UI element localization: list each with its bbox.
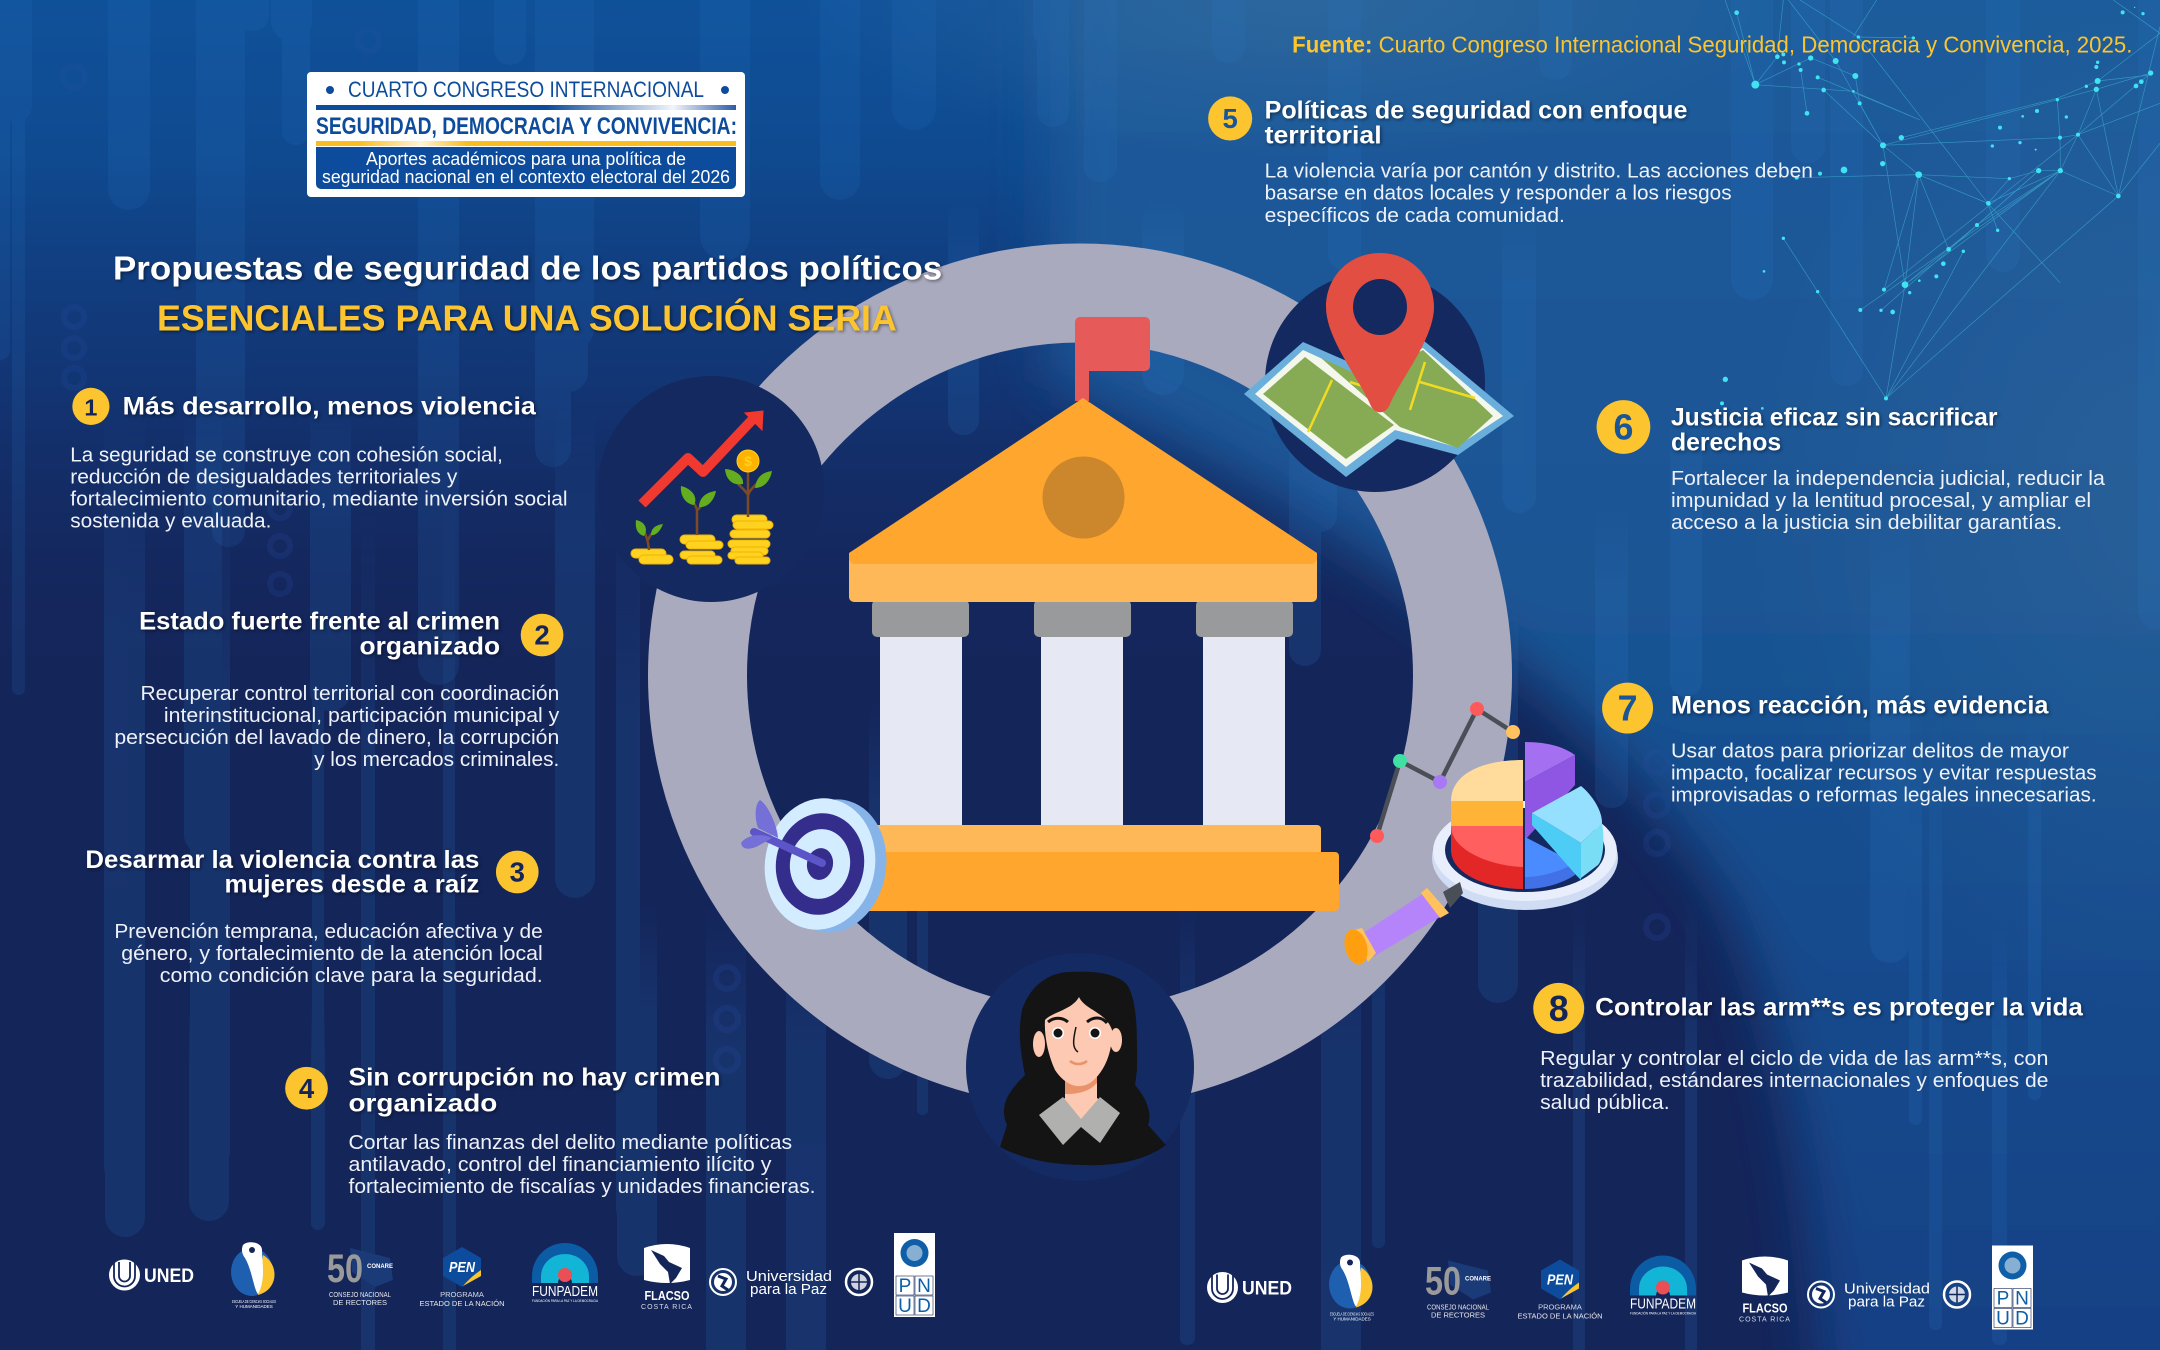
body 1: fortalecimiento comunitario, mediante inversión social bbox=[70, 488, 568, 511]
sprouts bbox=[641, 472, 760, 550]
heading 3: Desarmar la violencia contra las bbox=[85, 847, 479, 874]
pie left bbox=[1451, 760, 1523, 801]
lens bbox=[1432, 806, 1618, 910]
body 8: trazabilidad, estándares internacionales y enfoques de bbox=[1540, 1069, 2048, 1092]
body 3: género, y fortalecimiento de la atención local bbox=[121, 942, 543, 965]
badge 3 bbox=[496, 851, 539, 893]
handle bbox=[1360, 893, 1440, 957]
logo row right bbox=[1207, 1246, 2033, 1330]
body 4: fortalecimiento de fiscalías y unidades financieras. bbox=[349, 1175, 816, 1198]
pediment oval bbox=[1042, 456, 1124, 538]
line chart bbox=[1377, 709, 1513, 836]
icon: data analytics and magnifier bbox=[1341, 702, 1618, 967]
logo: PNUD: U bbox=[898, 1296, 912, 1317]
face bbox=[1045, 997, 1112, 1086]
facial features bbox=[1048, 1018, 1107, 1064]
badge 4: 4 bbox=[299, 1073, 315, 1104]
badge 1 bbox=[72, 388, 110, 425]
source line: Fuente: Cuarto Congreso Internacional Seguridad, Democracia y Convivencia, 2025. bbox=[1292, 31, 2132, 57]
logo: FUNPADEM: FUNDACIÓN PARA LA PAZ Y LA DEMOCRACIA bbox=[532, 1298, 598, 1303]
item 5 bbox=[1208, 96, 1813, 227]
title bbox=[113, 251, 942, 339]
heading 4 bbox=[349, 1065, 720, 1118]
heading 1: Más desarrollo, menos violencia bbox=[123, 394, 536, 421]
body 2: interinstitucional, participación municipal y bbox=[164, 704, 560, 727]
body 7: impacto, focalizar recursos y evitar respuestas bbox=[1671, 762, 2097, 785]
badge 6 bbox=[1597, 400, 1650, 454]
body 1: sostenida y evaluada. bbox=[70, 510, 271, 533]
ears bbox=[1033, 1031, 1045, 1057]
logo: CONARE bbox=[327, 1247, 393, 1307]
logo: PEN: PEN bbox=[1547, 1272, 1574, 1288]
heading 5: territorial bbox=[1265, 122, 1382, 149]
logo: FLACSO bbox=[1739, 1256, 1791, 1324]
badge 2 bbox=[521, 614, 563, 656]
congress subtitle bbox=[316, 147, 736, 189]
logo: PNUD: N bbox=[917, 1276, 931, 1297]
logo: PNUD bbox=[1992, 1246, 2033, 1330]
logo: FLACSO: COSTA RICA bbox=[641, 1304, 693, 1311]
item 7 bbox=[1602, 683, 2097, 807]
congress line 2: SEGURIDAD, DEMOCRACIA Y CONVIVENCIA: bbox=[316, 113, 737, 140]
logo: Universidad para la Paz: para la Paz bbox=[750, 1281, 827, 1298]
heading 3 bbox=[85, 847, 479, 899]
congress line 1: CUARTO CONGRESO INTERNACIONAL bbox=[348, 77, 704, 102]
central ring bbox=[698, 293, 1462, 1058]
body 6: acceso a la justicia sin debilitar garantías. bbox=[1671, 511, 2062, 534]
pin bbox=[1326, 253, 1434, 412]
logo: CONARE: DE RECTORES bbox=[333, 1298, 387, 1307]
logo: PEN: PROGRAMA bbox=[440, 1290, 484, 1299]
logo: Universidad para la Paz: para la Paz bbox=[1848, 1294, 1925, 1310]
map land bbox=[1263, 357, 1394, 459]
logo: school: ESCUELA DE CIENCIAS SOCIALES bbox=[232, 1299, 276, 1304]
column base upper step bbox=[860, 825, 1321, 855]
column capitals bbox=[872, 600, 1293, 637]
heading 6: derechos bbox=[1671, 429, 1781, 456]
body 8 bbox=[1540, 1047, 2048, 1114]
logo: FUNPADEM: FUNPADEM bbox=[1630, 1296, 1696, 1312]
logo: PNUD: U bbox=[1996, 1308, 2010, 1330]
body 6: impunidad y la lentitud procesal, y ampliar el bbox=[1671, 489, 2091, 512]
entablature bbox=[849, 555, 1317, 602]
body 2: persecución del lavado de dinero, la corrupción bbox=[114, 726, 559, 749]
logo: PNUD: D bbox=[917, 1296, 931, 1317]
body 8: salud pública. bbox=[1540, 1091, 1670, 1114]
item 1 bbox=[70, 388, 568, 533]
logo: school: Y HUMANIDADES bbox=[235, 1304, 273, 1309]
heading 2 bbox=[139, 609, 500, 660]
body 3: como condición clave para la seguridad. bbox=[160, 964, 543, 987]
icon circle: growth bbox=[598, 376, 824, 602]
badge 8 bbox=[1533, 983, 1584, 1034]
logo: UN emblem bbox=[1944, 1282, 1970, 1308]
body 1: reducción de desigualdades territoriales y bbox=[70, 466, 458, 489]
item 8 bbox=[1533, 983, 2083, 1114]
body 1 bbox=[70, 443, 568, 533]
hair and shoulders bbox=[1000, 972, 1166, 1165]
badge 7: 7 bbox=[1618, 688, 1638, 728]
badge 3: 3 bbox=[510, 857, 525, 888]
body 5: basarse en datos locales y responder a los riesgos bbox=[1265, 182, 1732, 205]
coins bbox=[631, 515, 773, 564]
pie right cyan bbox=[1532, 813, 1581, 880]
logo: UNED: UNED bbox=[1242, 1278, 1292, 1300]
logo: UPAZ emblem bbox=[710, 1269, 736, 1295]
icon circle: person bbox=[966, 953, 1194, 1181]
logo: PNUD: P bbox=[1997, 1288, 2009, 1310]
logo: FUNPADEM: FUNPADEM bbox=[532, 1283, 598, 1300]
logo: FUNPADEM: FUNDACIÓN PARA LA PAZ Y LA DEMOCRACIA bbox=[1630, 1310, 1696, 1316]
map outer bbox=[1244, 340, 1514, 477]
icon: target with arrow bbox=[741, 789, 897, 941]
body 4: Cortar las finanzas del delito mediante políticas bbox=[349, 1131, 792, 1154]
logo: FLACSO: COSTA RICA bbox=[1739, 1316, 1791, 1324]
icon circle: map bbox=[1265, 272, 1485, 492]
logo: CONARE: 50 bbox=[1425, 1260, 1461, 1304]
badge 6: 6 bbox=[1613, 407, 1633, 447]
dollar coin bbox=[737, 450, 759, 472]
body 3 bbox=[114, 920, 543, 987]
logo: PNUD bbox=[894, 1233, 935, 1317]
logo: CONARE: CONSEJO NACIONAL bbox=[1427, 1302, 1489, 1312]
body 1: La seguridad se construye con cohesión social, bbox=[70, 443, 503, 466]
badge 7 bbox=[1602, 683, 1653, 734]
title line 2: ESENCIALES PARA UNA SOLUCIÓN SERIA bbox=[157, 299, 897, 339]
logo: CONARE: CONSEJO NACIONAL bbox=[329, 1290, 391, 1299]
heading 2: Estado fuerte frente al crimen bbox=[139, 609, 500, 636]
logo: school bbox=[1329, 1255, 1374, 1322]
pie right blue bbox=[1525, 837, 1575, 889]
body 5 bbox=[1265, 160, 1813, 227]
congress subtitle: Aportes académicos para una política de bbox=[366, 149, 686, 169]
heading 8: Controlar las arm**s es proteger la vida bbox=[1595, 994, 2083, 1021]
logo: PNUD: N bbox=[2015, 1288, 2029, 1310]
logo: CONARE: 50 bbox=[327, 1247, 363, 1291]
logo: PEN: ESTADO DE LA NACIÓN bbox=[1518, 1312, 1602, 1320]
logo: UN emblem bbox=[846, 1269, 872, 1295]
logo: school: ESCUELA DE CIENCIAS SOCIALES bbox=[1330, 1312, 1374, 1316]
body 2 bbox=[114, 682, 560, 771]
logo: school bbox=[231, 1242, 276, 1309]
body 6 bbox=[1671, 467, 2105, 534]
body 6: Fortalecer la independencia judicial, reducir la bbox=[1671, 467, 2105, 490]
body 7 bbox=[1671, 740, 2097, 807]
logo: PNUD: P bbox=[899, 1276, 911, 1297]
flag bbox=[1075, 317, 1150, 401]
logo: PEN: PEN bbox=[449, 1259, 476, 1276]
logo: CONARE: CONARE bbox=[1465, 1276, 1491, 1282]
collar bbox=[1039, 1097, 1120, 1145]
body 7: Usar datos para priorizar delitos de mayor bbox=[1671, 740, 2069, 763]
logo: CONARE: DE RECTORES bbox=[1431, 1310, 1485, 1320]
heading 4: Sin corrupción no hay crimen bbox=[349, 1065, 720, 1092]
logo: PEN bbox=[1518, 1260, 1602, 1320]
item 4 bbox=[285, 1065, 816, 1198]
logo row left bbox=[109, 1233, 935, 1317]
icon: woman portrait bbox=[1000, 972, 1166, 1165]
logo: UNED: UNED bbox=[144, 1266, 194, 1287]
heading 6: Justicia eficaz sin sacrificar bbox=[1671, 405, 1998, 432]
heading 2: organizado bbox=[360, 633, 500, 660]
logo: FUNPADEM bbox=[532, 1243, 598, 1303]
logo: UPAZ emblem bbox=[1808, 1282, 1834, 1308]
body 3: Prevención temprana, educación afectiva y de bbox=[114, 920, 543, 943]
badge 5: 5 bbox=[1222, 103, 1238, 134]
heading 7: Menos reacción, más evidencia bbox=[1671, 693, 2049, 720]
item 3 bbox=[85, 847, 543, 987]
body 2: y los mercados criminales. bbox=[314, 748, 559, 771]
logo: FLACSO: FLACSO bbox=[644, 1288, 690, 1303]
network decoration bbox=[1720, 0, 2160, 410]
badge 5 bbox=[1208, 96, 1252, 141]
heading 6 bbox=[1671, 405, 1998, 456]
heading 4: organizado bbox=[349, 1091, 497, 1118]
item 2 bbox=[114, 609, 563, 771]
logo: UNED bbox=[109, 1260, 194, 1290]
body 4: antilavado, control del financiamiento ilícito y bbox=[349, 1153, 772, 1176]
body 5: específicos de cada comunidad. bbox=[1265, 204, 1565, 227]
body 2: Recuperar control territorial con coordinación bbox=[141, 682, 559, 705]
logo: CONARE: CONARE bbox=[367, 1264, 393, 1270]
icon: growth chart and coins bbox=[631, 411, 773, 564]
title line 1: Propuestas de seguridad de los partidos políticos bbox=[113, 251, 942, 288]
column base lower step bbox=[860, 852, 1339, 911]
logo: FUNPADEM bbox=[1630, 1256, 1696, 1316]
logo: PNUD: D bbox=[2015, 1308, 2029, 1330]
logo: Universidad para la Paz: Universidad bbox=[746, 1268, 832, 1285]
pie right purple bbox=[1525, 742, 1575, 782]
logo: FLACSO: FLACSO bbox=[1742, 1300, 1788, 1316]
logo: Universidad para la Paz bbox=[746, 1268, 832, 1298]
badge 4 bbox=[285, 1067, 328, 1110]
neck bbox=[1062, 1080, 1100, 1125]
logo: Universidad para la Paz bbox=[1844, 1280, 1930, 1310]
badge 2: 2 bbox=[534, 620, 550, 651]
logo: PEN: ESTADO DE LA NACIÓN bbox=[420, 1299, 504, 1308]
logo: PEN: PROGRAMA bbox=[1538, 1302, 1582, 1312]
congress logo box bbox=[307, 72, 745, 197]
pediment roof bbox=[849, 398, 1317, 564]
icon: bank building bbox=[849, 317, 1339, 911]
logo: PEN bbox=[420, 1247, 504, 1308]
item 6 bbox=[1597, 400, 2105, 534]
logo: CONARE bbox=[1425, 1260, 1491, 1320]
logo: school: Y HUMANIDADES bbox=[1333, 1316, 1371, 1322]
heading 3: mujeres desde a raíz bbox=[225, 872, 479, 899]
heading 5: Políticas de seguridad con enfoque bbox=[1265, 97, 1687, 124]
body 8: Regular y controlar el ciclo de vida de las arm**s, con bbox=[1540, 1047, 2048, 1070]
body 4 bbox=[349, 1131, 816, 1198]
icon: map with location pin bbox=[1244, 253, 1514, 477]
logo: UNED bbox=[1207, 1272, 1292, 1303]
columns bbox=[880, 637, 1285, 825]
logo: FLACSO bbox=[641, 1244, 693, 1311]
congress subtitle: seguridad nacional en el contexto electoral del 2026 bbox=[322, 167, 730, 187]
badge 8: 8 bbox=[1549, 989, 1569, 1029]
heading 5 bbox=[1265, 97, 1687, 149]
body 5: La violencia varía por cantón y distrito. Las acciones deben bbox=[1265, 160, 1813, 183]
logo: Universidad para la Paz: Universidad bbox=[1844, 1280, 1930, 1298]
arrow bbox=[642, 420, 752, 504]
badge 1: 1 bbox=[84, 394, 97, 420]
body 7: improvisadas o reformas legales innecesarias. bbox=[1671, 784, 2097, 807]
icon: growth chart and coins: $ bbox=[744, 453, 752, 469]
